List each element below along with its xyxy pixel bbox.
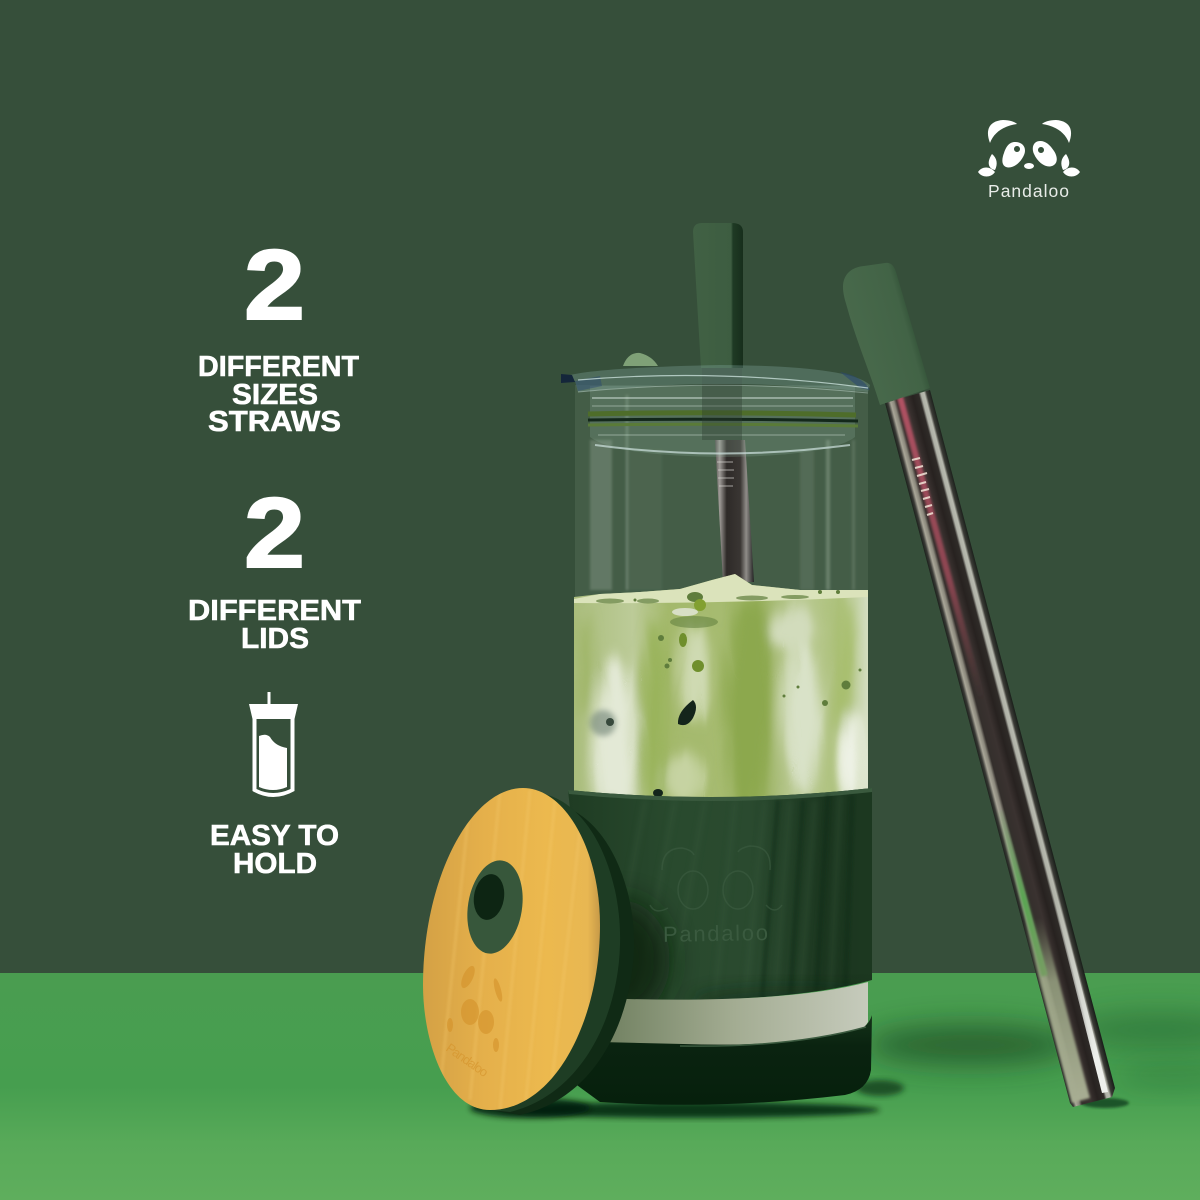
green table surface — [0, 973, 1200, 1200]
silicone sleeve — [568, 788, 872, 1000]
straw shaft — [885, 390, 1115, 1107]
label: easy to hold — [210, 820, 339, 880]
label: easy to hold: EASY TO — [210, 820, 339, 852]
engraved logo on lid — [443, 964, 504, 1080]
sleeve lid shadow — [626, 892, 836, 1000]
label: different lids: LIDS — [241, 623, 309, 655]
bamboo lid — [423, 788, 634, 1118]
matcha drink — [573, 570, 868, 810]
engraved wordmark on lid: Pandaloo — [443, 1040, 491, 1080]
lid nub behind rim — [623, 353, 658, 366]
lid silicone seal — [490, 790, 634, 1115]
straw through lid — [702, 368, 742, 440]
sleeve dark ribs — [762, 795, 852, 1000]
wood grain — [440, 790, 580, 1110]
label: different sizes straws: SIZES — [232, 379, 318, 411]
inner metal straw — [715, 440, 754, 582]
big stainless steel straw — [843, 263, 1115, 1107]
matcha crust and specks — [574, 574, 868, 797]
text block: 2 different lids — [188, 477, 361, 655]
straw hole grommet — [461, 856, 529, 958]
panda ears — [988, 120, 1017, 143]
label: different sizes straws: DIFFERENT — [198, 351, 359, 383]
glass body — [575, 385, 868, 600]
number 2 second: 2 — [244, 477, 305, 588]
pale milk patches — [592, 651, 630, 797]
panda leaves — [978, 154, 997, 176]
straw red reflection — [897, 396, 985, 702]
text block: 2 different sizes straws — [198, 229, 359, 438]
sleeve top edge — [568, 788, 872, 801]
straw bright stripe — [1053, 898, 1108, 1093]
number 2: 2 — [244, 229, 305, 340]
label: easy to hold: HOLD — [233, 848, 317, 880]
silicone tip of inner straw — [693, 223, 743, 368]
ice dark spots — [678, 700, 696, 725]
wood disc — [423, 788, 600, 1110]
straw green reflection — [998, 810, 1048, 977]
icon: tumbler — [249, 692, 298, 797]
logo wordmark: Pandaloo — [988, 181, 1069, 201]
label: different lids — [188, 595, 361, 655]
straw ribs — [912, 458, 933, 515]
clear ice clump — [672, 608, 698, 616]
sleeve ribs — [610, 795, 840, 1000]
straw silver lower reflection — [1022, 910, 1090, 1103]
silicone base — [570, 1015, 872, 1105]
panda nose — [1024, 163, 1034, 169]
logo: Pandaloo panda — [978, 120, 1080, 201]
label: different sizes straws — [198, 351, 359, 438]
grommet hole — [471, 872, 507, 922]
embossed panda logo on sleeve — [650, 846, 782, 911]
lid rim — [561, 365, 870, 392]
table shadows — [500, 1012, 1200, 1118]
lid ring highlights — [588, 398, 858, 454]
embossed wordmark on sleeve: Pandaloo — [663, 920, 768, 947]
label: different lids: DIFFERENT — [188, 595, 361, 627]
frosted glass band — [600, 982, 868, 1046]
glass highlights — [590, 395, 855, 590]
tumbler — [561, 365, 870, 600]
lid silicone ring — [490, 788, 620, 1112]
threaded lid insert — [590, 386, 855, 457]
inner straw ribs — [717, 462, 734, 486]
straw silicone tip — [843, 263, 930, 405]
panda eyes — [1002, 142, 1025, 167]
lid ground shadow — [470, 1098, 590, 1118]
label: different sizes straws: STRAWS — [208, 406, 341, 438]
darker green streaks — [723, 600, 767, 810]
base highlight — [680, 1027, 866, 1046]
